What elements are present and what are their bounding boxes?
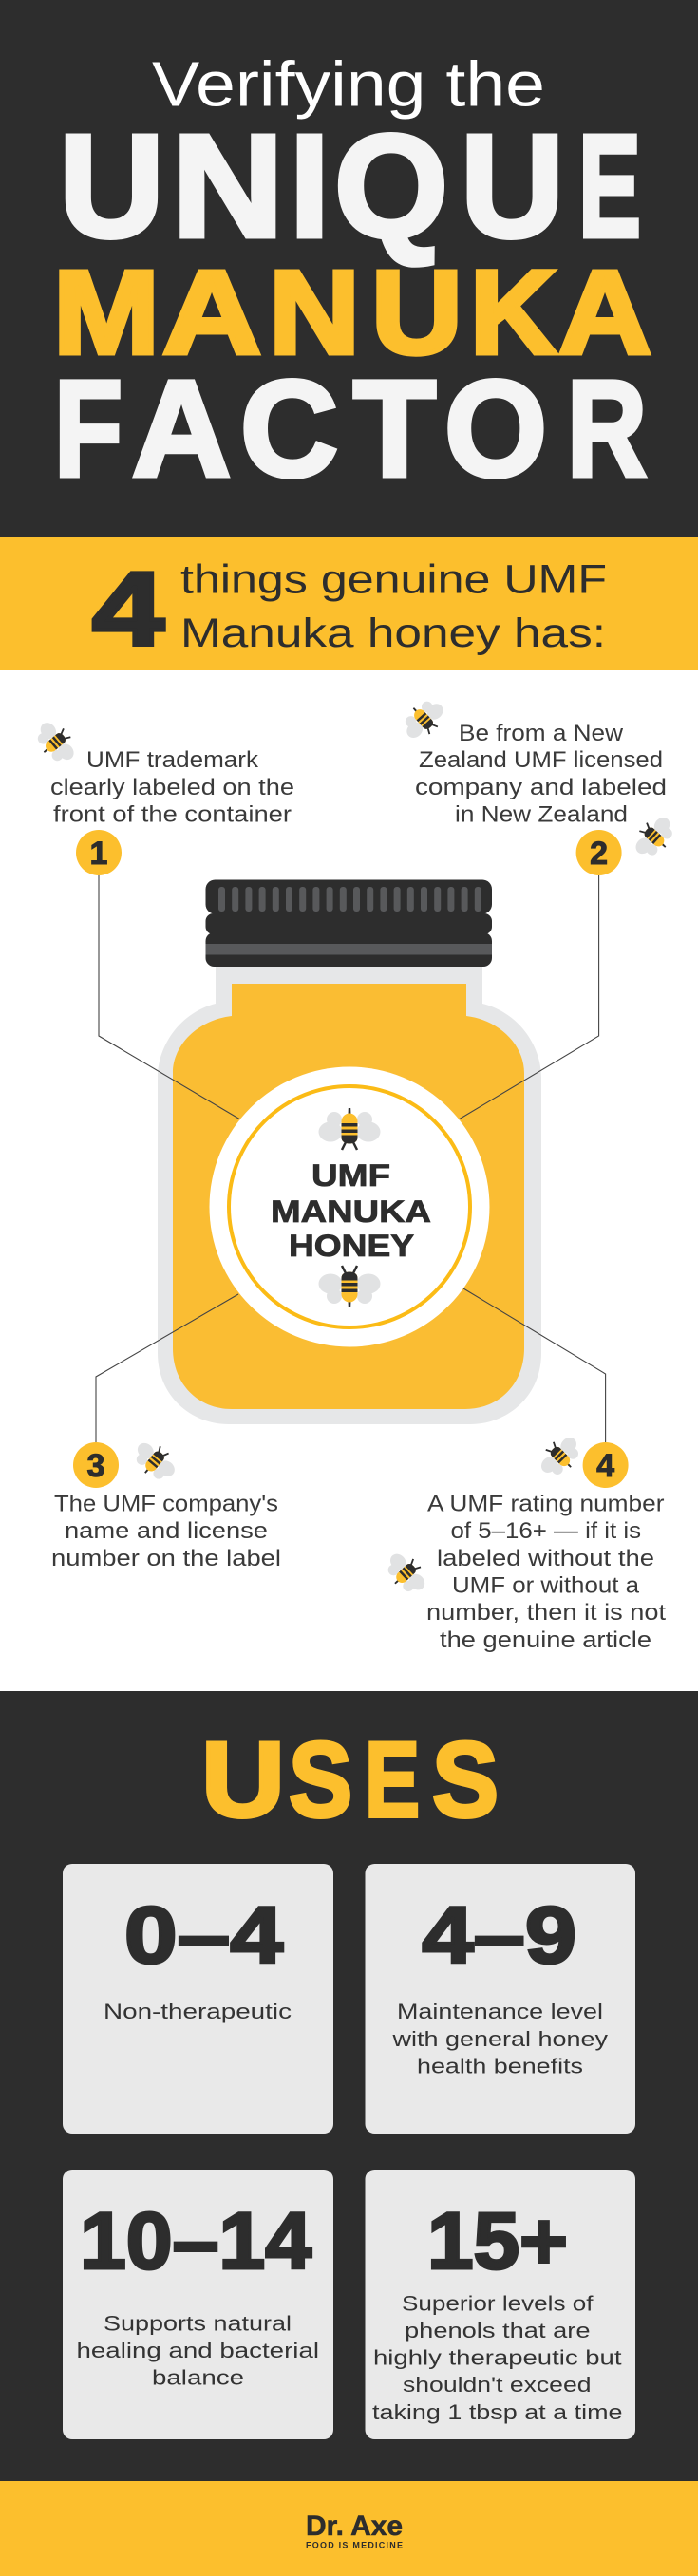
- title line: MANUKA: U: [371, 247, 462, 379]
- card text: Supports natural: [104, 2311, 292, 2336]
- range number: 10–14: [80, 2196, 311, 2285]
- heading: USES: U: [201, 1720, 285, 1839]
- callout 4 number badge: 4: [596, 1448, 614, 1484]
- subtitle line 2: Manuka honey has:: [180, 611, 606, 656]
- range number: 4–9: [422, 1890, 576, 1980]
- callout 3 number badge: [73, 1442, 119, 1488]
- callout 4 text: number, then it is not: [426, 1600, 666, 1626]
- callout 3: [51, 1436, 281, 1571]
- panel: header background: [0, 0, 698, 537]
- range number: 0–4: [124, 1890, 283, 1980]
- heading: USES: E: [365, 1720, 420, 1839]
- title line: UNIQUE: E: [578, 104, 641, 268]
- callout 4 text: UMF or without a: [452, 1572, 640, 1599]
- card text: Superior levels of: [402, 2292, 594, 2315]
- title line: UNIQUE: Q: [334, 104, 448, 268]
- title line: FACTOR: C: [240, 352, 338, 505]
- jar illustration: [158, 879, 541, 1424]
- card text: [391, 2000, 608, 2078]
- callout 3 number badge: 3: [87, 1448, 104, 1484]
- callout 3 text: name and license: [65, 1518, 268, 1544]
- callout 1 text: UMF trademark: [86, 747, 259, 773]
- icon: bee 1: [29, 716, 82, 769]
- callout 2 text: Zealand UMF licensed: [419, 747, 663, 773]
- title line: MANUKA: A: [162, 247, 261, 379]
- callout 3 text: number on the label: [51, 1546, 281, 1571]
- card text: [372, 2292, 623, 2424]
- panel: white jar section background: [0, 670, 698, 1691]
- label text: [271, 1158, 431, 1263]
- callout 2 text: in New Zealand: [455, 801, 628, 828]
- title line: UNIQUE: N: [172, 104, 284, 268]
- card: 0-4: [63, 1864, 333, 2134]
- callout 1 number badge: [76, 830, 122, 875]
- card: 10-14: [63, 2170, 333, 2439]
- callout 1 text: [50, 747, 294, 828]
- callout 4 text: the genuine article: [440, 1627, 651, 1653]
- label text: MANUKA: [271, 1194, 431, 1229]
- callout 2 number badge: [576, 830, 622, 875]
- callout 4 text: [426, 1491, 666, 1653]
- title line: UNIQUE: U: [59, 104, 164, 268]
- title line: FACTOR: F: [54, 352, 123, 505]
- icon: bee 3: [128, 1436, 181, 1487]
- title line: MANUKA: K: [470, 247, 557, 379]
- title line: MANUKA: M: [53, 247, 160, 379]
- callout 2: [397, 693, 680, 875]
- callout 3 text: The UMF company's: [54, 1491, 278, 1517]
- card: 15+: [365, 2170, 635, 2439]
- title line: Verifying the: Verifying the: [152, 49, 545, 120]
- callout 2 text: company and labeled: [415, 775, 667, 800]
- card text: health benefits: [417, 2055, 583, 2078]
- panel: footer band: [0, 2481, 698, 2576]
- card text: highly therapeutic but: [373, 2345, 621, 2370]
- icon: bee 4b: [380, 1547, 432, 1600]
- jar lid: [205, 879, 492, 967]
- callout 4 text: of 5–16+ — if it is: [450, 1518, 641, 1544]
- callout 1 text: front of the container: [53, 801, 292, 828]
- big number 4: 4: [92, 551, 164, 668]
- connector lines: [96, 875, 606, 1442]
- callout 3 text: [51, 1491, 281, 1571]
- card text: with general honey: [391, 2027, 608, 2051]
- icon: label bee bottom: [319, 1266, 380, 1307]
- callout 4 number badge: [583, 1442, 629, 1488]
- title line: FACTOR: O: [444, 352, 547, 505]
- callout 4: [380, 1430, 666, 1653]
- panel: uses section background: [0, 1691, 698, 2481]
- callout 1 text: clearly labeled on the: [50, 775, 294, 800]
- panel: subtitle band: [0, 537, 698, 670]
- subtitle line 1: things genuine UMF: [180, 556, 607, 602]
- range number: 15+: [427, 2196, 568, 2285]
- title line: UNIQUE: I: [290, 104, 330, 268]
- card text: Maintenance level: [397, 2000, 603, 2023]
- title line: MANUKA: N: [269, 247, 360, 379]
- icon: bee 2a: [397, 693, 450, 745]
- jar label: [209, 1067, 490, 1346]
- label text: HONEY: [289, 1229, 414, 1263]
- icon: bee 2b: [629, 811, 680, 863]
- card: 4-9: [365, 1864, 635, 2134]
- card text: balance: [152, 2366, 244, 2389]
- logo: Dr. Axe: Dr. Axe: [306, 2510, 403, 2542]
- callout 4 text: A UMF rating number: [427, 1491, 665, 1517]
- callout 1 number badge: 1: [90, 836, 107, 872]
- title line: FACTOR: A: [132, 352, 231, 505]
- logo tagline: FOOD IS MEDICINE: [306, 2541, 403, 2550]
- heading: USES: S: [432, 1720, 499, 1839]
- card text: taking 1 tbsp at a time: [372, 2400, 623, 2424]
- heading: USES: S: [289, 1720, 352, 1839]
- title line: FACTOR: T: [353, 352, 436, 505]
- jar honey fill: [173, 984, 524, 1409]
- title line: UNIQUE: U: [461, 104, 564, 268]
- label text: UMF: [311, 1158, 390, 1193]
- callout 2 number badge: 2: [590, 836, 608, 872]
- card text: Non-therapeutic: [104, 2000, 292, 2023]
- icon: label bee top: [319, 1108, 380, 1150]
- title: [53, 49, 651, 505]
- icon: bee 4a: [534, 1430, 587, 1483]
- callout 1: [29, 716, 294, 875]
- title line: MANUKA: A: [558, 247, 651, 379]
- card text: healing and bacterial: [76, 2339, 319, 2362]
- title line: FACTOR: R: [567, 352, 647, 505]
- card text: shouldn't exceed: [403, 2373, 591, 2397]
- card text: phenols that are: [405, 2319, 591, 2342]
- callout 2 text: [415, 721, 667, 828]
- callout 2 text: Be from a New: [459, 721, 624, 746]
- card text: [76, 2311, 319, 2389]
- callout 4 text: labeled without the: [437, 1546, 654, 1571]
- jar glass outline: [158, 967, 541, 1424]
